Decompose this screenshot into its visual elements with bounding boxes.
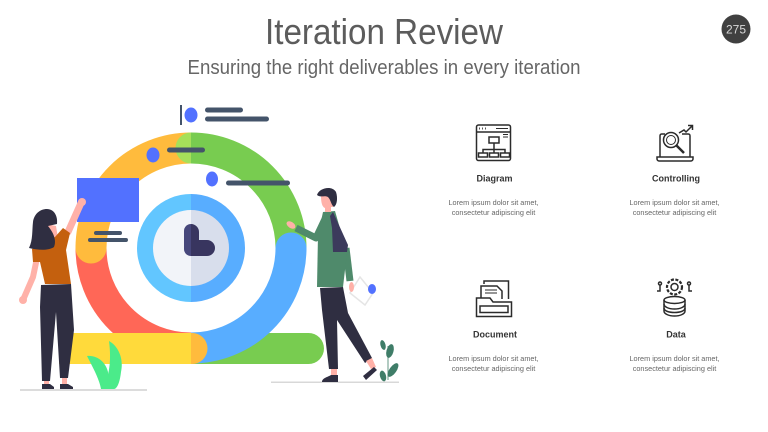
yellow bar [59,333,191,364]
subtitle: Ensuring the right deliverables in every iteration [188,57,580,79]
illustration: spiral ring chart with clock [59,105,324,364]
plant: green leaves [87,341,122,389]
clock face [153,210,191,286]
paper [350,277,373,305]
jacket [317,211,347,287]
page number badge: 275 [726,22,746,36]
neck and face [321,196,333,212]
icon: laptop with magnifier [657,126,693,161]
heading: Diagram [476,174,513,184]
body text: consectetur adipiscing elit [633,208,716,217]
shoes [322,375,338,382]
annotation dots [146,108,218,186]
arms [68,203,81,232]
held dot [368,284,376,294]
body text: Lorem ipsum dolor sit amet, [629,198,720,207]
icon: diagram window [476,125,510,160]
reaching arm [296,219,325,238]
ground line [20,389,147,391]
body text: consectetur adipiscing elit [633,364,716,373]
light green cap [176,132,191,164]
far arm [346,248,350,281]
clock hands [184,224,191,256]
heading: Data [666,330,687,340]
item: Data [629,280,720,373]
icon: database with gear [657,280,692,316]
hair [29,209,57,250]
hair [317,188,337,207]
trousers [40,284,74,381]
backpack [330,212,348,252]
orange ring end cap [76,232,106,264]
body text: Lorem ipsum dolor sit amet, [448,354,539,363]
ankles [331,369,337,376]
icon: document folder [476,281,512,316]
green base bar [170,333,324,364]
orange bar cap [191,333,208,364]
trousers [320,287,372,369]
shirt [32,228,71,284]
neck [47,224,58,240]
illustration: woman reaching up [19,198,147,391]
page number badge [722,14,750,44]
item: Document [448,281,539,373]
red ring segment [91,248,191,348]
plant: dark leaves [379,340,400,382]
outer clock ring [137,194,191,302]
ankles [44,378,67,384]
orange ring segment [91,148,191,248]
title: Iteration Review [265,11,504,52]
blue note card [77,178,139,222]
body text: consectetur adipiscing elit [452,208,535,217]
heading: Controlling [652,174,700,184]
annotation marks [88,105,290,242]
shoes [42,384,54,389]
body text: Lorem ipsum dolor sit amet, [448,198,539,207]
blue ring end cap [276,232,306,264]
item: Diagram [448,125,539,217]
ground line [271,382,399,383]
body text: Lorem ipsum dolor sit amet, [629,354,720,363]
green ring segment [191,148,291,248]
item: Controlling [629,126,720,217]
hand [285,220,297,230]
body text: consectetur adipiscing elit [452,364,535,373]
illustration: man walking [271,188,399,383]
blue ring segment [191,248,291,348]
heading: Document [473,330,517,340]
